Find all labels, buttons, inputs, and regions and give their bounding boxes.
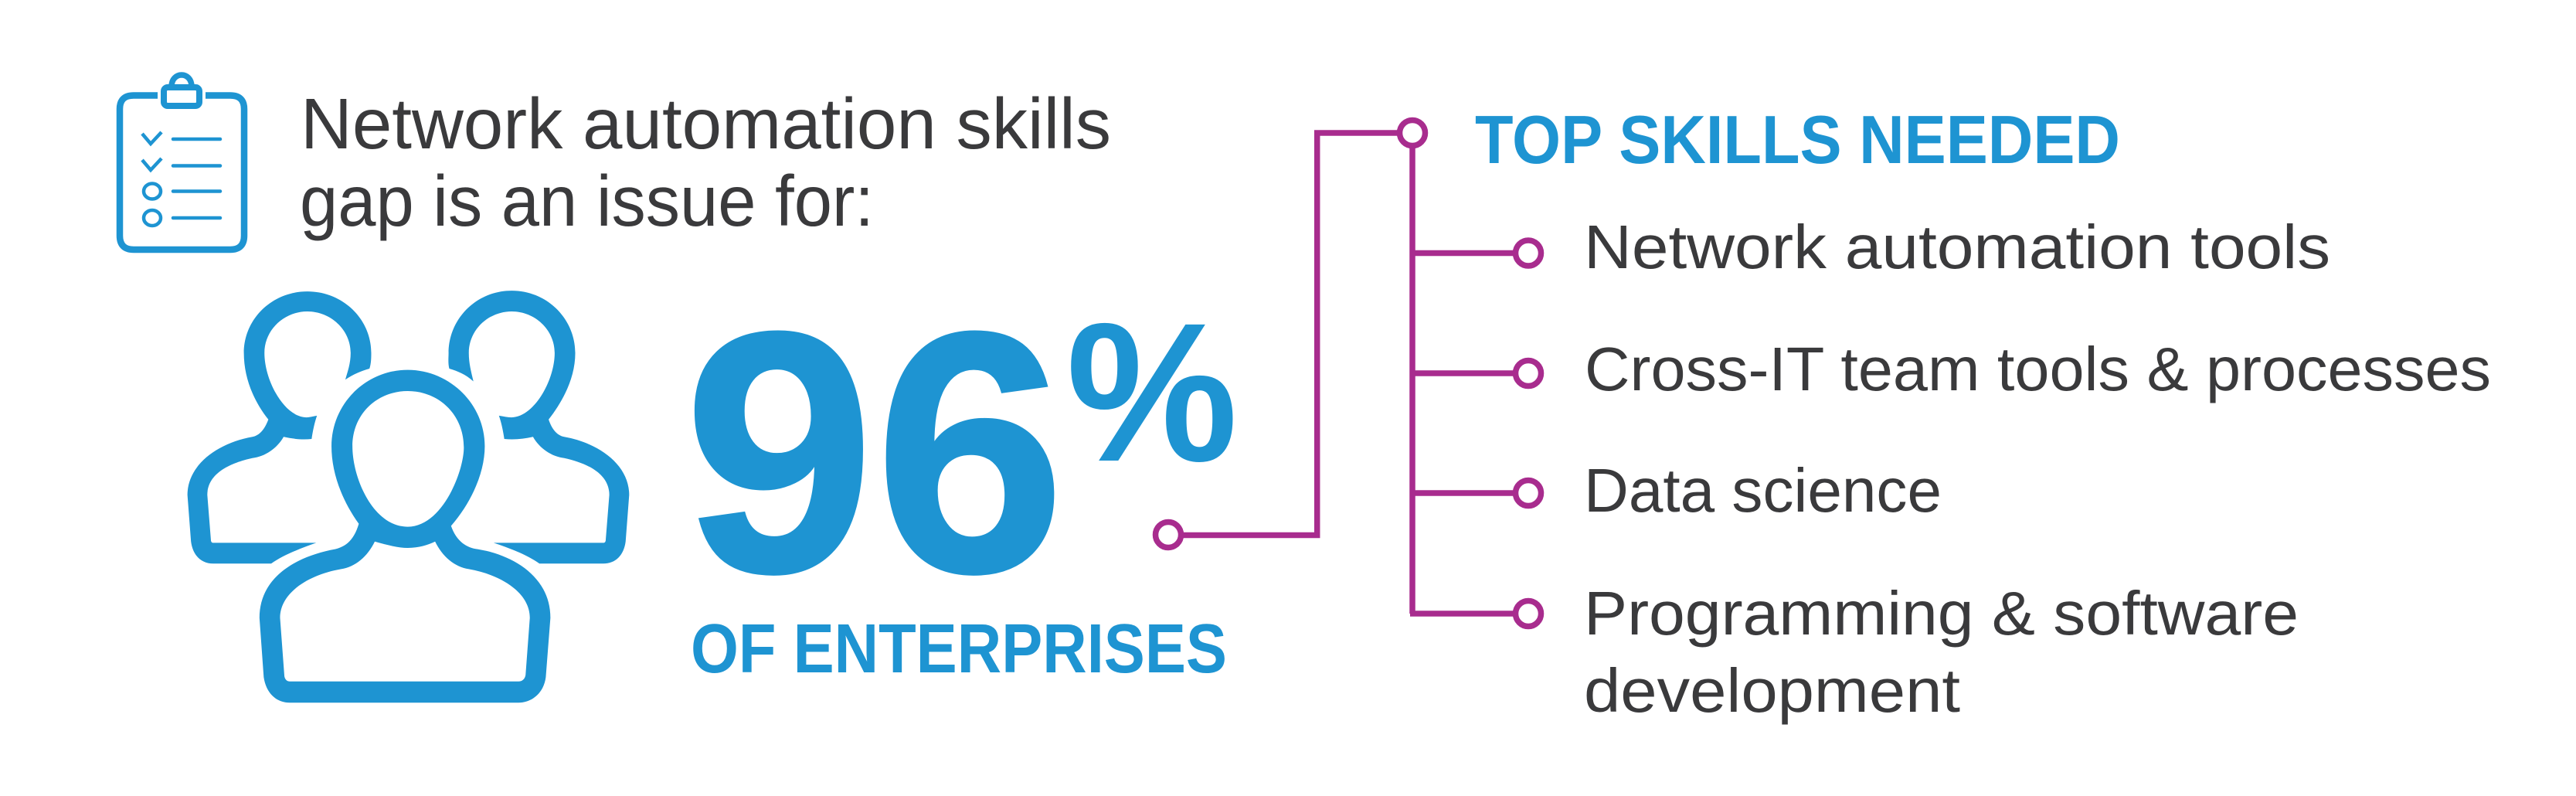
list: skills xyxy=(1584,213,2491,725)
node: skill 3 xyxy=(1516,481,1541,505)
statistic: 96% of enterprises: 96 xyxy=(684,261,1065,645)
person: left xyxy=(188,291,371,563)
connector: statistic to top skills xyxy=(1156,133,1398,547)
skill: programming and software development: development xyxy=(1584,656,1960,725)
node: skill 1 xyxy=(1516,240,1541,266)
skill: network automation tools: Network automation tools xyxy=(1584,213,2330,281)
heading: skills gap statement xyxy=(300,83,1111,241)
icon: clipboard checklist xyxy=(120,75,244,250)
skill: programming and software development xyxy=(1584,579,2299,725)
node: top skills xyxy=(1400,121,1425,145)
heading: top skills needed: TOP SKILLS NEEDED xyxy=(1475,101,2120,178)
node: skill 2 xyxy=(1516,360,1541,386)
statistic: 96% of enterprises xyxy=(684,261,1238,688)
skill: data science: Data science xyxy=(1584,456,1942,525)
skills tree connector xyxy=(1400,121,1541,626)
skill: cross-IT team tools and processes: Cross-IT team tools & processes xyxy=(1585,335,2491,403)
heading: skills gap statement: Network automation skills xyxy=(301,83,1111,164)
statistic: 96% of enterprises: % xyxy=(1066,282,1238,503)
skill: programming and software development: Programming & software xyxy=(1584,579,2299,648)
heading: skills gap statement: gap is an issue for: xyxy=(300,161,874,241)
person: right xyxy=(448,291,629,563)
person: centre xyxy=(260,370,550,702)
node: skill 4 xyxy=(1516,601,1541,626)
statistic: 96% of enterprises: OF ENTERPRISES xyxy=(691,611,1227,688)
icon: group of three people xyxy=(188,291,629,702)
